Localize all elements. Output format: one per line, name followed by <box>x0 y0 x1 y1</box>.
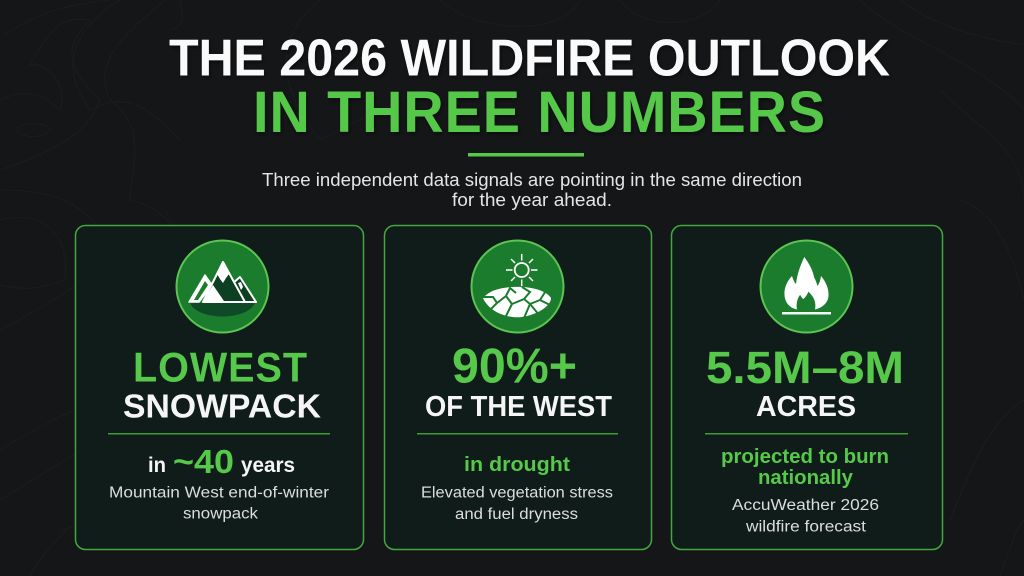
description <box>109 484 329 522</box>
divider <box>705 433 908 434</box>
stat subhead: SNOWPACK <box>123 388 321 424</box>
icon: mountains <box>176 240 268 332</box>
card background <box>672 226 942 550</box>
divider <box>417 433 618 434</box>
description: Mountain West end-of-winter <box>109 484 329 502</box>
description: Elevated vegetation stress <box>421 484 613 502</box>
stat context: in drought <box>464 453 570 476</box>
stat context: years <box>241 454 295 477</box>
stat context <box>148 443 295 480</box>
stat context: nationally <box>758 467 854 489</box>
icon: flame <box>760 240 852 332</box>
description <box>421 484 613 523</box>
description <box>732 497 879 536</box>
divider <box>108 433 330 434</box>
stat headline: 5.5M–8M <box>706 342 904 393</box>
title underline <box>468 153 584 156</box>
subtitle <box>262 170 802 210</box>
stat context: projected to burn <box>721 446 889 468</box>
panel: acres <box>672 226 942 550</box>
stat headline: 90%+ <box>452 340 577 394</box>
description: AccuWeather 2026 <box>732 497 879 514</box>
title line 1: THE 2026 WILDFIRE OUTLOOK <box>169 30 890 88</box>
panel: drought <box>384 226 652 550</box>
stat context: in <box>148 454 166 477</box>
stat subhead: ACRES <box>756 391 856 423</box>
card background <box>384 226 652 550</box>
stat context <box>721 446 889 489</box>
icon: sun over cracked earth <box>472 240 564 332</box>
title <box>169 30 890 145</box>
description: wildfire forecast <box>745 518 867 536</box>
subtitle: for the year ahead. <box>452 190 612 210</box>
stat context: ~40 <box>173 443 234 480</box>
panel: snowpack <box>76 226 364 550</box>
description: and fuel dryness <box>455 506 578 523</box>
subtitle: Three independent data signals are pointing in the same direction <box>262 170 802 190</box>
title line 2: IN THREE NUMBERS <box>253 80 826 145</box>
description: snowpack <box>183 506 258 522</box>
stat headline: LOWEST <box>133 344 308 390</box>
stat subhead: OF THE WEST <box>425 391 612 423</box>
card background <box>76 226 364 550</box>
